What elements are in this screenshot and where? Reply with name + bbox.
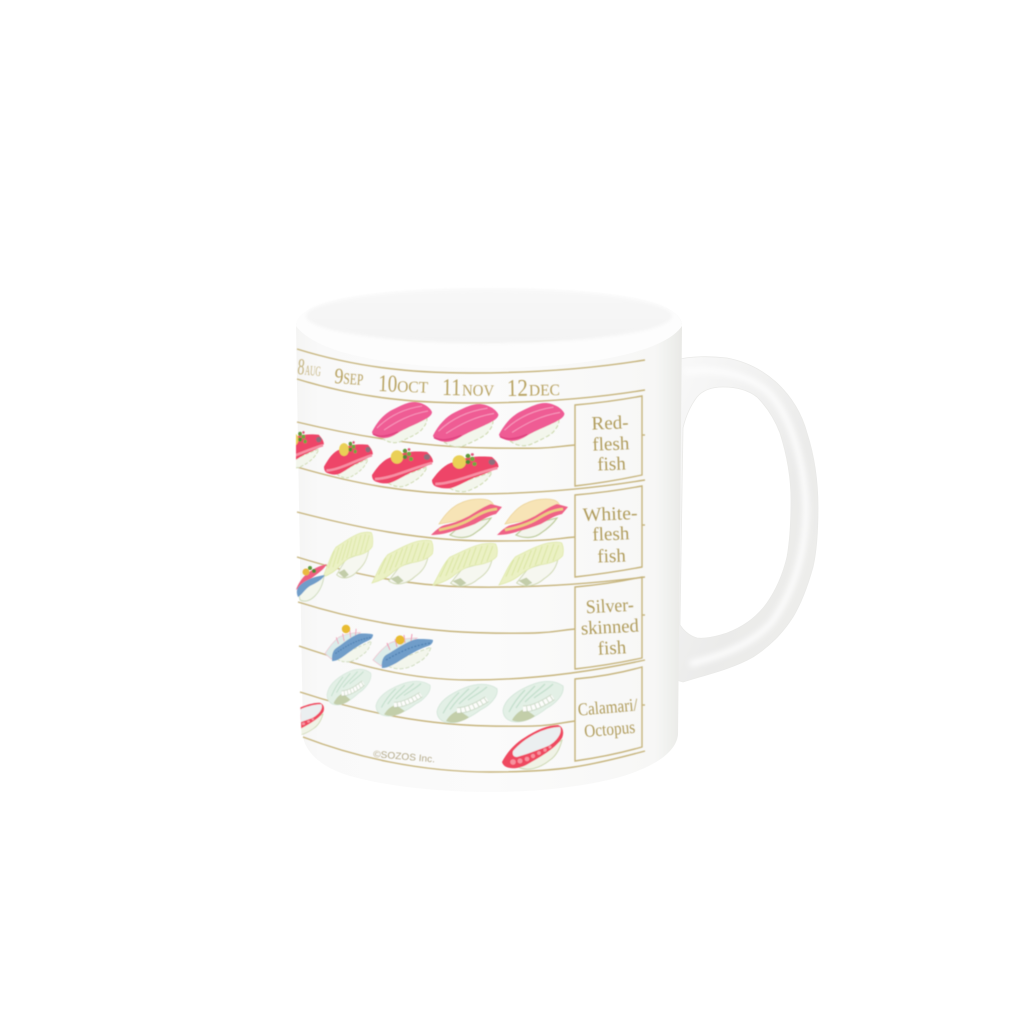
label box: silver-skinned fish xyxy=(575,577,645,669)
label text: White-flesh fish: flesh xyxy=(592,523,630,546)
label text: Red-flesh fish: Red- xyxy=(591,412,629,435)
month: September: 9SEP xyxy=(334,363,364,390)
label text: Red-flesh fish: flesh xyxy=(592,433,630,456)
calendar row lines xyxy=(297,349,645,772)
month: December: 12DEC xyxy=(507,375,560,402)
mug handle xyxy=(676,357,818,682)
month: August: 8AUG xyxy=(297,354,322,381)
label text: Red-flesh fish: fish xyxy=(597,453,627,475)
label text: Silver-skinned fish xyxy=(579,595,641,661)
row: seared tuna sushi xyxy=(272,431,498,492)
label box: white-flesh fish xyxy=(575,486,645,577)
label text: Calamari/Octopus: Octopus xyxy=(583,717,636,741)
row: octopus sushi xyxy=(272,703,563,769)
label box: red-flesh fish xyxy=(575,396,645,486)
label text: Red-flesh fish xyxy=(591,412,631,476)
label text: Calamari/Octopus: Calamari/ xyxy=(577,694,638,720)
sushi calendar print xyxy=(272,349,645,772)
label text: Silver-skinned fish: fish xyxy=(597,637,627,660)
copyright: ©SOZOS Inc. xyxy=(373,749,435,765)
mug body xyxy=(296,288,682,792)
month header xyxy=(297,354,560,402)
label text: White-flesh fish: White- xyxy=(582,503,638,526)
row: silver-skinned fish sushi xyxy=(325,625,433,669)
row: calamari sushi xyxy=(327,669,563,723)
month: October: 10OCT xyxy=(378,371,429,399)
label box: calamari / octopus xyxy=(575,667,645,761)
row: pale green white-flesh sushi xyxy=(323,532,563,586)
label text: White-flesh fish: fish xyxy=(597,545,627,567)
month: November: 11NOV xyxy=(442,375,495,402)
label text: White-flesh fish xyxy=(582,503,639,568)
label text: Silver-skinned fish: Silver- xyxy=(585,595,634,618)
label text: Calamari/Octopus xyxy=(577,694,640,742)
row: tuna sushi xyxy=(372,402,564,447)
clipped garnished silver fish sushi xyxy=(296,564,327,601)
row: yellowtail sushi xyxy=(431,499,568,537)
label text: Silver-skinned fish: skinned xyxy=(580,616,640,640)
